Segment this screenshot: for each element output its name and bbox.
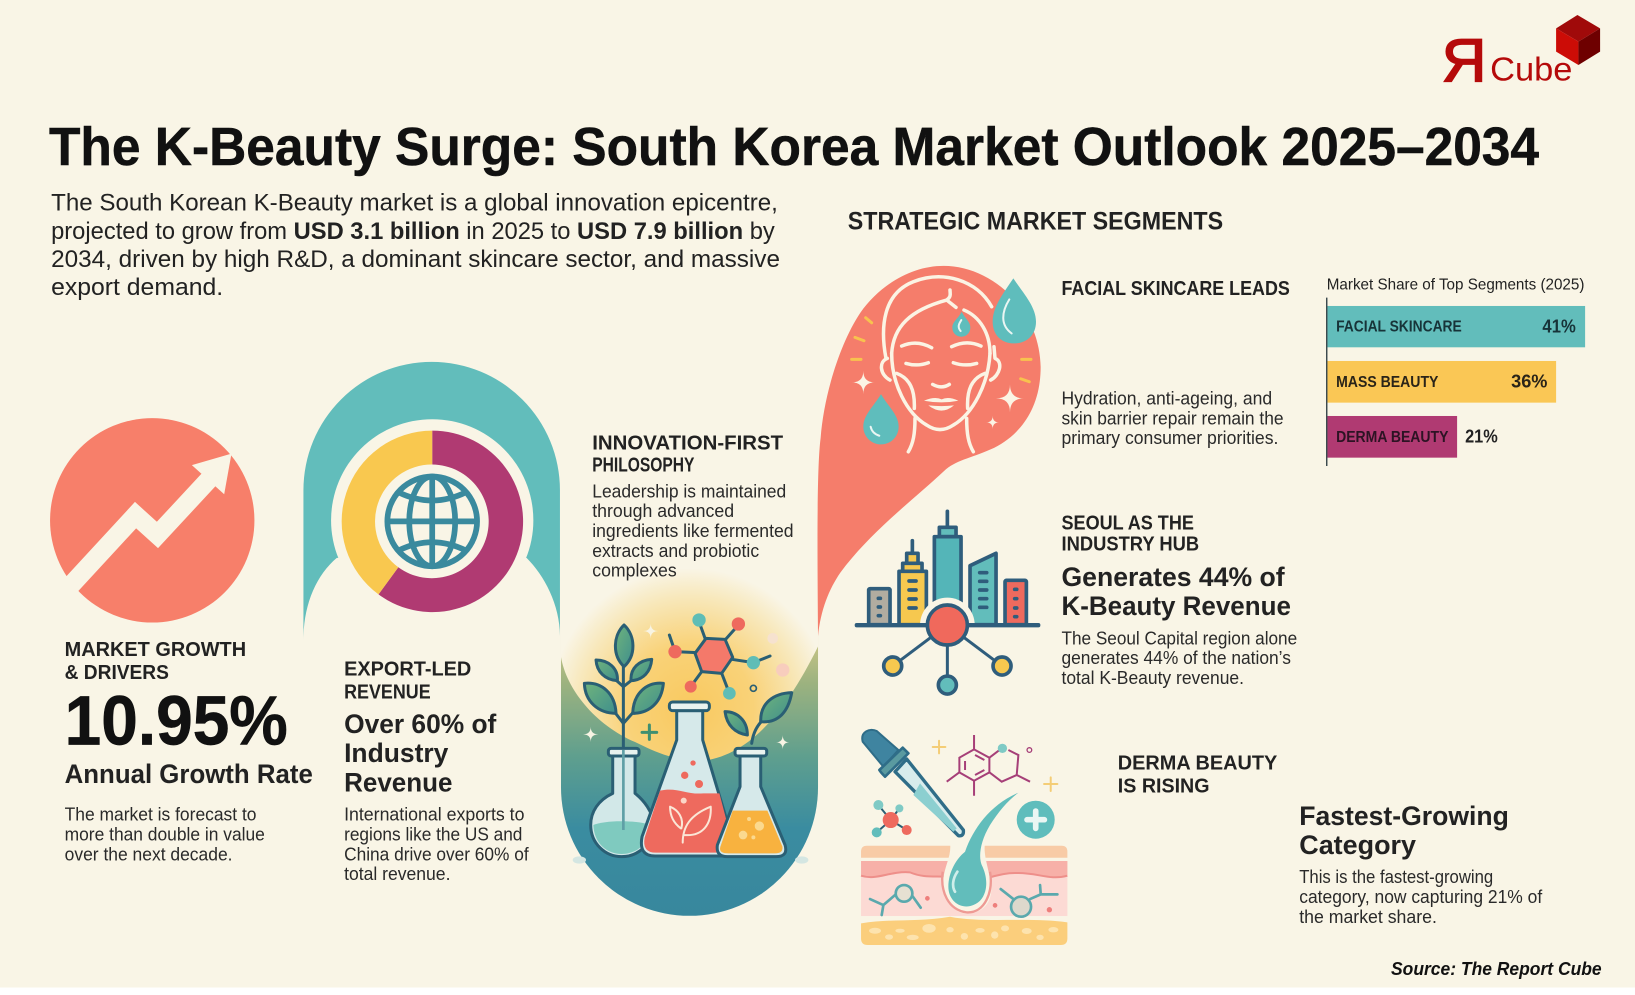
panel: market growth: & DRIVERS xyxy=(65,662,169,684)
panel: fastest-growing category: category, now capturing 21% of xyxy=(1299,886,1543,907)
panel: innovation-first philosophy xyxy=(592,432,794,581)
panel: facial skincare leads: skin barrier repair remain the xyxy=(1061,407,1284,428)
follicle gap xyxy=(943,843,991,913)
panel: export-led revenue: China drive over 60% of xyxy=(344,843,529,864)
panel: market growth: The market is forecast to xyxy=(65,804,257,825)
panel: facial skincare leads: Hydration, anti-ageing, and xyxy=(1061,388,1272,409)
panel: innovation-first philosophy: complexes xyxy=(592,560,677,581)
panel: Seoul hub: The Seoul Capital region alone xyxy=(1061,627,1297,648)
bar chart: market share xyxy=(1327,276,1585,466)
big flask xyxy=(641,702,733,856)
bar chart: market share: MASS BEAUTY xyxy=(1336,374,1438,391)
panel: innovation-first philosophy: PHILOSOPHY xyxy=(592,454,695,476)
panel: Seoul hub: Generates 44% of xyxy=(1061,561,1286,592)
intro text block: The South Korean K-Beauty market is a global innovation epicentre, xyxy=(51,190,778,217)
dropper xyxy=(862,730,963,836)
skin layers xyxy=(861,846,1067,945)
intro text block xyxy=(51,190,780,301)
sparkles xyxy=(583,623,789,750)
panel: innovation-first philosophy: Leadership is maintained xyxy=(592,480,786,501)
panel: export-led revenue: Revenue xyxy=(344,766,453,797)
bar chart: market share: FACIAL SKINCARE xyxy=(1336,319,1462,336)
source note: Source: The Report Cube xyxy=(1391,958,1602,979)
bar chart: market share: DERMA BEAUTY xyxy=(1336,429,1448,446)
panel: facial skincare leads xyxy=(1061,278,1290,448)
panel: facial skincare leads: primary consumer priorities. xyxy=(1061,427,1278,448)
bar chart: market share: 21% xyxy=(1465,426,1498,447)
panel: fastest-growing category: This is the fastest-growing xyxy=(1299,866,1493,887)
panel: market growth: over the next decade. xyxy=(65,843,233,864)
logo: RCube: Я xyxy=(1442,27,1486,95)
panel: export-led revenue: total revenue. xyxy=(344,863,450,884)
icon: lab flasks and plants xyxy=(573,613,808,864)
panel: export-led revenue: International exports to xyxy=(344,804,524,825)
panel: Seoul hub: K-Beauty Revenue xyxy=(1061,590,1291,621)
panel: innovation-first philosophy: ingredients like fermented xyxy=(592,520,794,541)
molecule and plus icons xyxy=(872,735,1057,839)
teal arch xyxy=(303,362,560,640)
serum droplet xyxy=(948,793,1018,906)
small flask xyxy=(717,748,786,857)
panel: market growth xyxy=(65,639,313,864)
icon: dropper and skin layers xyxy=(861,730,1067,945)
panel: fastest-growing category: Category xyxy=(1299,829,1416,860)
panel: export-led revenue: EXPORT-LED xyxy=(344,659,471,681)
panel: Seoul hub xyxy=(1061,513,1297,688)
bar chart: market share: Market Share of Top Segments (2025) xyxy=(1327,276,1584,293)
panel: derma beauty heading: DERMA BEAUTY xyxy=(1118,753,1278,775)
pill background xyxy=(561,563,818,916)
icon: donut with globe xyxy=(331,419,533,621)
panel: export-led revenue xyxy=(344,659,529,884)
follicle outline xyxy=(942,872,991,912)
icon: city hub xyxy=(855,511,1040,694)
logo: RCube xyxy=(1442,15,1600,95)
panel: export-led revenue: Over 60% of xyxy=(344,708,497,739)
panel: export-led revenue: Industry xyxy=(344,737,448,768)
panel: Seoul hub: INDUSTRY HUB xyxy=(1061,534,1199,556)
panel: fastest-growing category: the market share. xyxy=(1299,906,1437,927)
panel: fastest-growing category: Fastest-Growing xyxy=(1299,800,1509,831)
intro text block: projected to grow from USD 3.1 billion in 2025 to USD 7.9 billion by xyxy=(51,218,775,245)
icon: growth circle with arrow xyxy=(50,418,254,623)
panel: innovation-first philosophy: extracts and probiotic xyxy=(592,540,759,561)
bar chart: market share: 41% xyxy=(1542,316,1576,337)
molecule xyxy=(668,613,789,700)
panel: market growth: MARKET GROWTH xyxy=(65,639,246,661)
panel: Seoul hub: total K-Beauty revenue. xyxy=(1061,667,1244,688)
panel: Seoul hub: generates 44% of the nation’s xyxy=(1061,647,1291,668)
bar chart: market share: 36% xyxy=(1511,371,1548,392)
panel: market growth: more than double in value xyxy=(65,823,265,844)
panel: derma beauty heading xyxy=(1118,753,1278,797)
panel: fastest-growing category xyxy=(1299,800,1543,927)
panel: export-led revenue: regions like the US and xyxy=(344,823,522,844)
logo: RCube: Cube xyxy=(1490,51,1572,88)
section heading: STRATEGIC MARKET SEGMENTS xyxy=(848,207,1223,235)
intro text block: export demand. xyxy=(51,274,223,301)
panel: Seoul hub: SEOUL AS THE xyxy=(1061,513,1194,535)
panel: derma beauty heading: IS RISING xyxy=(1118,775,1210,797)
panel: facial skincare leads: FACIAL SKINCARE LEADS xyxy=(1061,278,1290,300)
coral swoosh xyxy=(818,266,1041,636)
icon: face with water drops xyxy=(852,277,1036,452)
left round flask xyxy=(591,748,653,857)
panel: market growth: Annual Growth Rate xyxy=(65,758,313,789)
intro text block: 2034, driven by high R&D, a dominant skincare sector, and massive xyxy=(51,246,780,273)
panel: innovation-first philosophy: INNOVATION-FIRST xyxy=(592,432,784,454)
panel: market growth: 10.95% xyxy=(65,682,288,760)
panel: innovation-first philosophy: through advanced xyxy=(592,500,734,521)
panel: export-led revenue: REVENUE xyxy=(344,682,431,704)
title: The K-Beauty Surge: South Korea Market Outlook 2025–2034 xyxy=(49,117,1539,177)
